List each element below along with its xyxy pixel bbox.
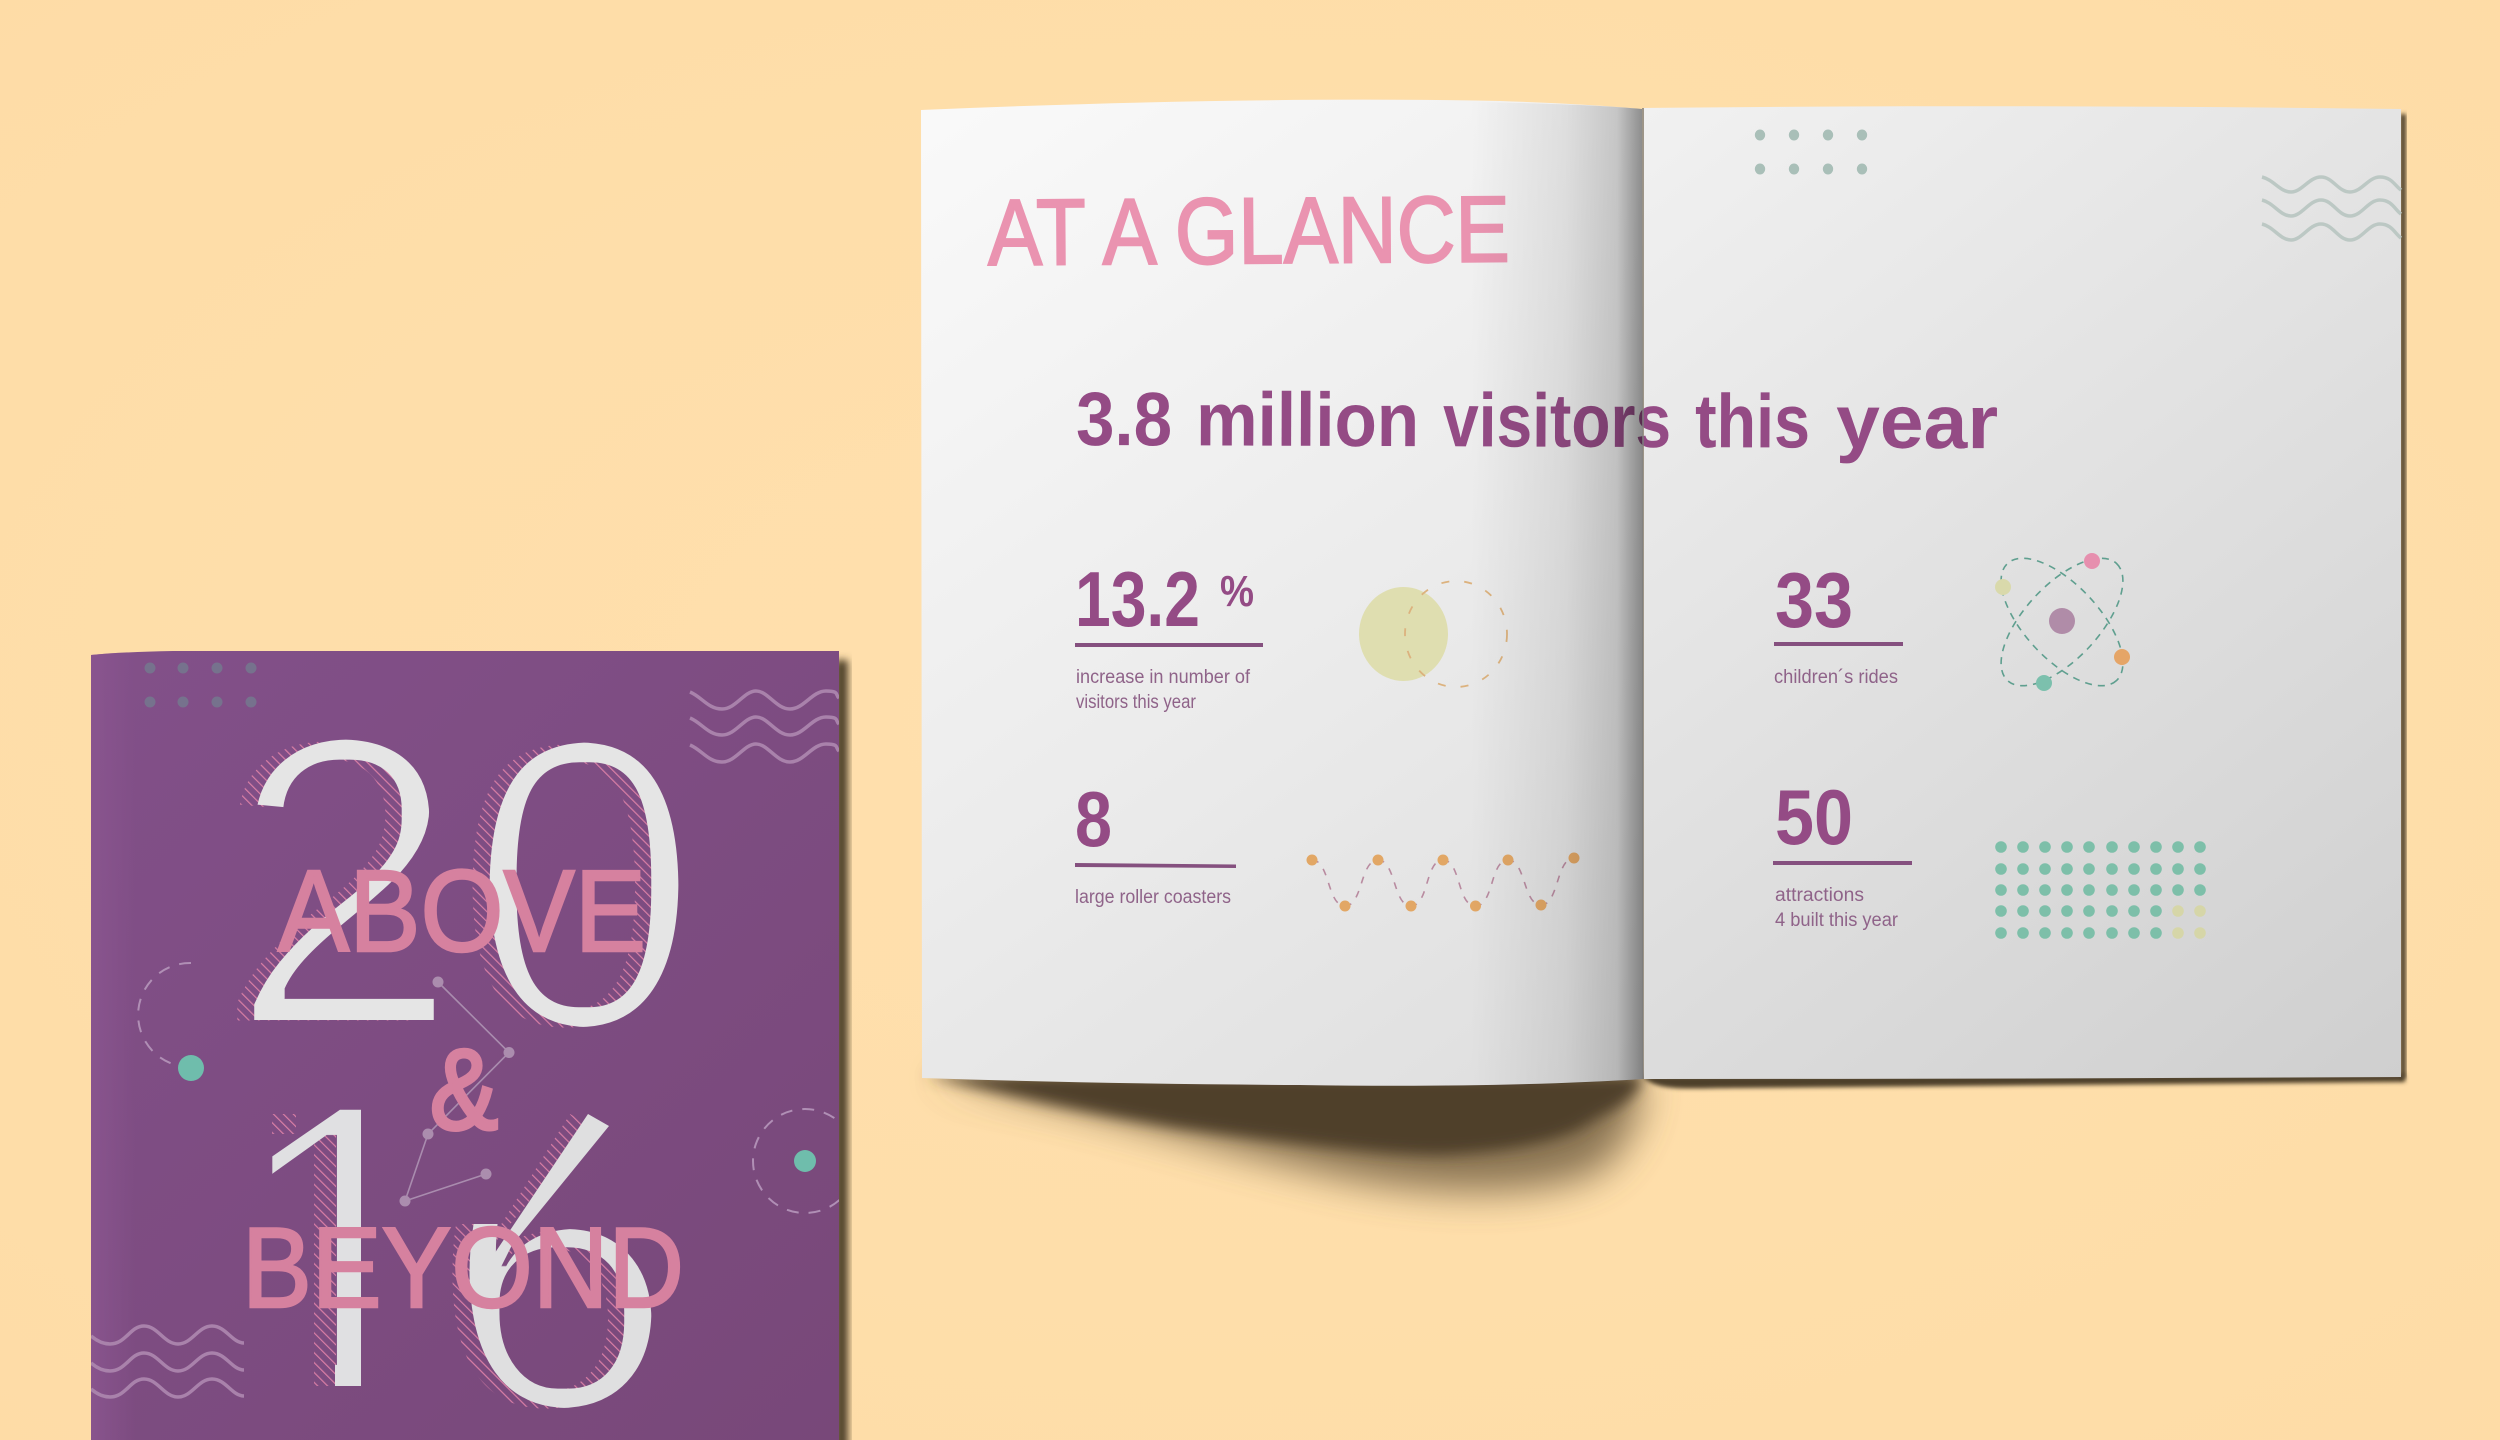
stat: 13.2 percent: % [1220,567,1254,616]
stat: 33 children's rides: 33 [1775,556,1853,644]
open book spread [921,100,2406,1192]
book shadow right page [1644,1074,2405,1089]
stat: 13.2 percent: 13.2 [1075,555,1200,643]
icon: overlapping circles [1359,581,1507,687]
cover title beyond: BEYOND [242,1205,684,1332]
headline stat: 3.8 [1076,377,1172,462]
hatched shadow of year digits: 0 [450,652,682,1119]
hatched shadow of year digits: 2 [210,649,442,1116]
stat: 8 roller coasters: large roller coasters [1075,887,1231,908]
headline stat: year [1836,380,1998,465]
book cover [91,649,857,1440]
stat: 8 roller coasters: 8 [1075,775,1112,863]
year digits 20 [254,740,678,1027]
year digits 20: 0 [468,652,700,1117]
hatched shadow of digit six stem [460,1114,582,1292]
headline stat: million [1196,377,1419,463]
cover shadow [835,660,848,1440]
stat: 33 children's rides [1774,556,1903,688]
cover dot grid [144,662,256,708]
cover waves top right [690,691,839,762]
stat: 33 children's rides: children´s rides [1774,667,1898,688]
book shadow right edge [2400,114,2406,1078]
cover waves bottom left [91,1326,244,1397]
stat: 13.2 percent: visitors this year [1076,692,1197,713]
icon: atom [1980,538,2144,706]
stat: 13.2 percent [1075,555,1263,713]
stat: 50 attractions: attractions [1775,885,1864,906]
left page [921,100,1643,1086]
stat: 50 attractions: 4 built this year [1775,910,1899,931]
hatched shadow of digit one [272,1114,336,1386]
stat: 50 attractions: 50 [1775,773,1853,861]
cover title above: ABOVE [278,846,646,976]
icon: roller coaster wave [1306,852,1580,912]
dashed orbit left with teal dot [138,963,204,1081]
right page [1644,106,2401,1079]
book shadow soft halo [925,1078,1643,1192]
book shadow core [925,1075,1643,1155]
page dots [1755,130,1867,174]
page waves [2262,177,2401,240]
headline stat: visitors [1443,378,1671,464]
stat: 8 roller coasters [1075,775,1236,908]
icon: dot grid of attractions [1995,841,2206,939]
headline stat [1076,377,1998,465]
year digit six [470,1114,652,1408]
dashed orbit right with teal dot [752,1108,839,1214]
ampersand: & [430,1027,498,1154]
headline stat: this [1695,379,1810,465]
constellation [400,976,514,1206]
hatched shadow of year digits [237,742,652,1409]
stat: 50 attractions [1773,773,1912,931]
cover panel [91,649,857,1440]
heading: at a glance: AT A GLANCE [987,176,1510,285]
year digits 20: 2 [228,649,460,1114]
stat: 13.2 percent: increase in number of [1076,667,1251,688]
